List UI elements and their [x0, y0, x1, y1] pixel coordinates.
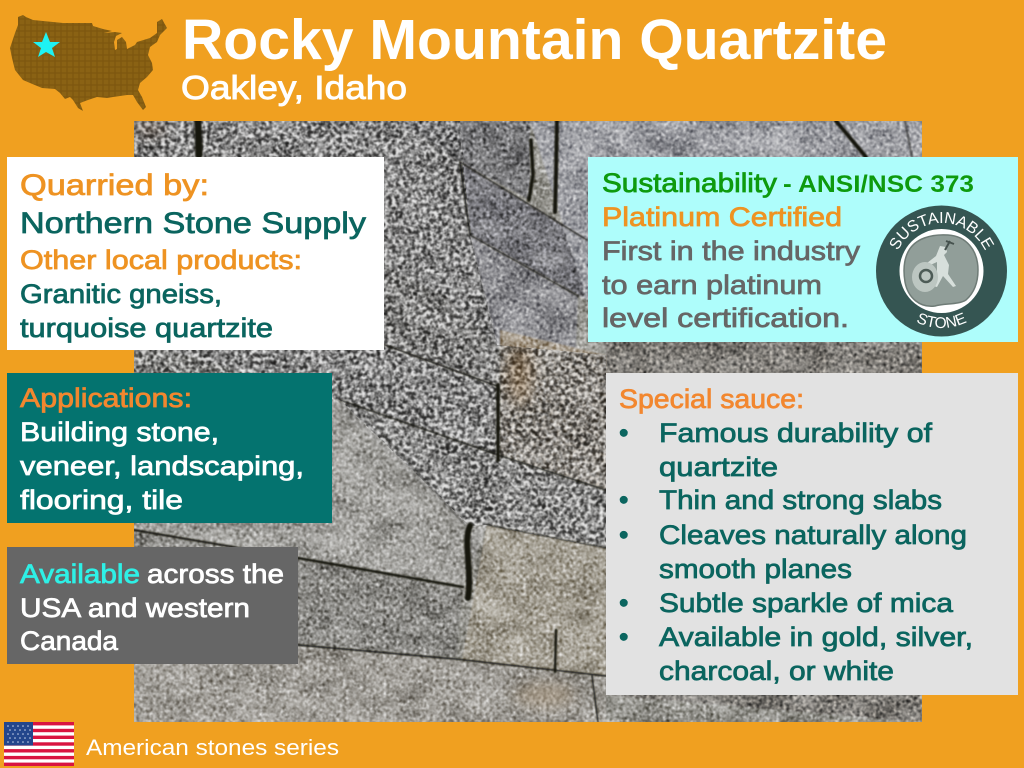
local products list: Granitic gneiss,	[20, 279, 222, 309]
panel: sustainability	[588, 157, 1018, 342]
icon: cyan star	[33, 32, 60, 57]
panel: applications	[7, 373, 332, 523]
icon: US flag	[4, 722, 74, 766]
bullet list: quartzite	[659, 452, 778, 482]
applications list	[20, 417, 304, 515]
bullet list	[619, 418, 973, 686]
applications list: veneer, landscaping,	[20, 451, 304, 481]
certification note: First in the industry	[602, 236, 861, 266]
bullet list: •	[619, 418, 628, 448]
icon: USA map with star	[10, 15, 167, 111]
bullet list: charcoal, or white	[659, 656, 894, 686]
bullet list: Subtle sparkle of mica	[659, 588, 954, 618]
local products list: turquoise quartzite	[20, 313, 273, 343]
applications list: Building stone,	[20, 417, 219, 447]
stone wall photograph	[134, 120, 922, 722]
title: Rocky Mountain Quartzite	[182, 8, 887, 72]
icon: sustainable stone badge	[876, 206, 1007, 336]
panel: availability	[7, 547, 298, 664]
quarry name: Northern Stone Supply	[20, 207, 366, 240]
certification note: level certification.	[602, 303, 849, 333]
icon: sustainable stone badge: SUSTAINABLE	[890, 212, 994, 250]
heading: applications: Applications:	[20, 383, 192, 413]
panel: quarried by	[7, 157, 384, 350]
bullet list: Cleaves naturally along	[659, 520, 967, 550]
heading: quarried by: Quarried by:	[20, 169, 209, 202]
bullet list: •	[619, 485, 628, 515]
heading: sustainability	[602, 168, 974, 198]
bullet list: Thin and strong slabs	[659, 485, 942, 515]
bullet list: •	[619, 622, 628, 652]
availability text: Available	[20, 559, 140, 589]
availability text	[20, 559, 284, 656]
subtitle: Oakley, Idaho	[181, 69, 407, 106]
bullet list: Available in gold, silver,	[659, 622, 973, 652]
availability text: USA and western	[20, 593, 250, 623]
footer: series label: American stones series	[86, 735, 339, 760]
heading: other local products: Other local products:	[20, 245, 302, 275]
icon: sustainable stone badge: STONE	[917, 312, 967, 328]
platinum certified: Platinum Certified	[602, 202, 842, 232]
certification note	[602, 236, 861, 333]
heading: special sauce: Special sauce:	[619, 384, 804, 414]
applications list: flooring, tile	[20, 485, 183, 515]
certification note: to earn platinum	[602, 270, 822, 300]
bullet list: Famous durability of	[659, 418, 933, 448]
bullet list: smooth planes	[659, 554, 852, 584]
bullet list: •	[619, 588, 628, 618]
heading: sustainability: Sustainability	[602, 168, 778, 198]
panel: special sauce	[606, 373, 1018, 695]
local products list	[20, 279, 273, 343]
bullet list: •	[619, 520, 628, 550]
availability text: Canada	[20, 626, 119, 656]
availability text: across the	[147, 559, 284, 589]
heading: sustainability: - ANSI/NSC 373	[783, 171, 974, 198]
